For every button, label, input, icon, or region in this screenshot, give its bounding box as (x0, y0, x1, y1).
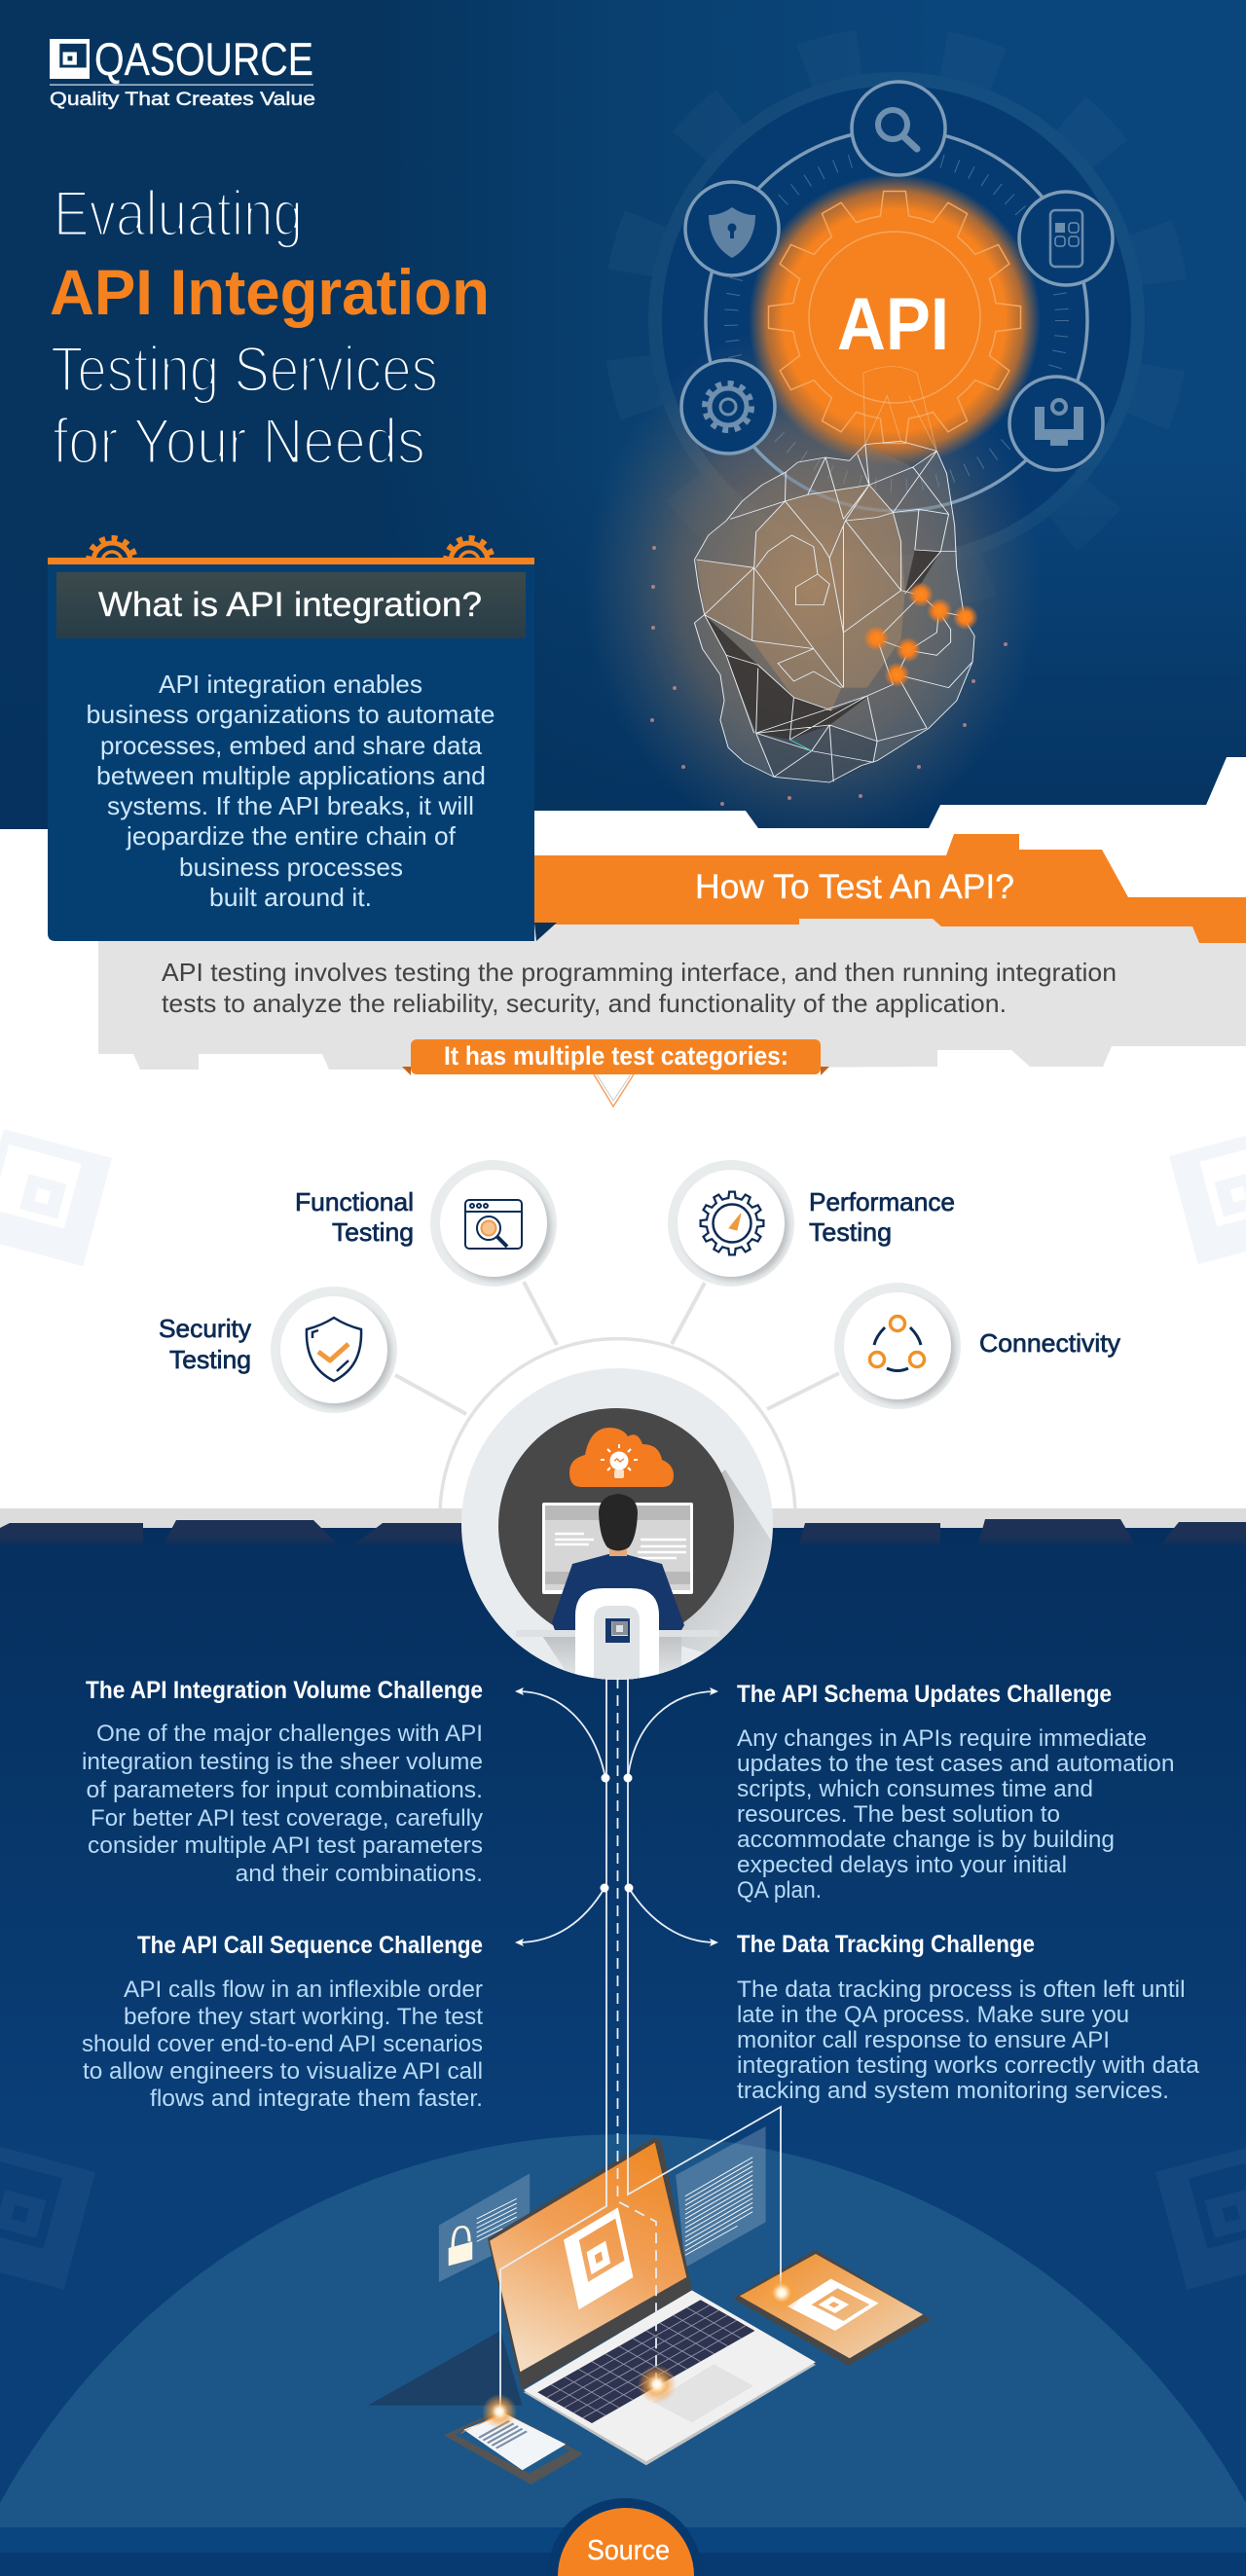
text: API Call Sequence Challenge: should cover end-to-end API scenarios (82, 2031, 483, 2057)
text: API Call Sequence Challenge: The API Call Sequence Challenge (137, 1932, 483, 1959)
text: API Integration Volume Challenge: For better API test coverage, carefully (91, 1805, 483, 1832)
panel: challenges background (0, 1508, 1246, 2576)
text: API Integration Volume Challenge: The API Integration Volume Challenge (86, 1677, 483, 1704)
text: API Schema Updates Challenge: QA plan. (737, 1877, 822, 1904)
text: Data Tracking Challenge: tracking and system monitoring services. (737, 2078, 1169, 2104)
label (295, 1187, 414, 1247)
category: Security Testing (159, 1287, 397, 1413)
keyboard (537, 2300, 754, 2423)
text: Data Tracking Challenge: The data tracking process is often left until (737, 1977, 1186, 2003)
arrow: volume challenge (518, 1691, 605, 1778)
text: API Integration Volume Challenge: One of the major challenges with API (96, 1721, 483, 1747)
arrowheads and nodes (482, 1687, 801, 2429)
watermark logos (0, 1127, 1246, 1266)
phone (446, 2411, 581, 2484)
text: API Integration Volume Challenge: and their combinations. (236, 1861, 483, 1887)
description text (162, 958, 1117, 1018)
panel body text (86, 670, 495, 912)
laptop shadow (368, 2331, 523, 2406)
particles (650, 546, 1008, 806)
logo: Quality That Creates Value (50, 90, 315, 110)
label: Performance (809, 1187, 955, 1216)
text: API Integration Volume Challenge: integration testing is the sheer volume (82, 1749, 483, 1775)
panel body text: jeopardize the entire chain of (126, 821, 457, 851)
monitor (542, 1503, 693, 1594)
cloud with idea (569, 1428, 674, 1487)
panel body text: processes, embed and share data (100, 731, 483, 760)
person (552, 1494, 684, 1630)
brown glow around the hand (600, 350, 1025, 828)
banner: How To Test An API (98, 834, 1246, 1070)
watermark logos (0, 2141, 1246, 2290)
connector lines (395, 1282, 839, 1516)
text: API Call Sequence Challenge: before they start working. The test (124, 2004, 483, 2030)
outer faint gear (648, 72, 1145, 535)
label: Testing (809, 1217, 892, 1247)
text: Data Tracking Challenge: integration testing works correctly with data (737, 2052, 1200, 2079)
grey description panel (98, 919, 1246, 1070)
source button: Source (587, 2535, 670, 2566)
banner heading: How To Test An API? (695, 868, 1014, 906)
label: Security (159, 1314, 251, 1343)
description text: API testing involves testing the programming interface, and then running integration (162, 958, 1117, 987)
label: Functional (295, 1187, 414, 1216)
arrow: schema challenge (628, 1691, 715, 1778)
person at computer badge (461, 1368, 779, 1684)
gear ornaments (86, 535, 495, 558)
category: Performance Testing (668, 1160, 955, 1287)
hand wireframe (694, 367, 978, 782)
text: Data Tracking Challenge: The Data Tracking Challenge (737, 1931, 1035, 1958)
category: Connectivity (834, 1283, 1120, 1409)
text: API Schema Updates Challenge (737, 1681, 1174, 1904)
text: API Call Sequence Challenge: API calls flow in an inflexible order (124, 1977, 483, 2003)
callout: multiple test categories: It has multiple test categories: (444, 1041, 788, 1070)
API label: API (837, 283, 949, 366)
panel body text: systems. If the API breaks, it will (107, 791, 474, 820)
panel body text: business processes (179, 853, 403, 882)
dark disc (498, 1408, 734, 1644)
text: API Schema Updates Challenge: Any changes in APIs require immediate (737, 1725, 1147, 1752)
vertical connector system (500, 1678, 781, 2412)
description text: tests to analyze the reliability, security, and functionality of the application. (162, 989, 1007, 1018)
text: API Call Sequence Challenge: to allow engineers to visualize API call (83, 2058, 483, 2085)
panel heading (56, 572, 526, 638)
icon: phone (1019, 192, 1113, 285)
API hub graphic (681, 82, 1113, 511)
title: Testing Services (51, 333, 438, 405)
icon: shield (307, 1318, 361, 1381)
title: Evaluating (54, 177, 303, 249)
title: API Integration (50, 256, 490, 328)
panel: what is API integration (48, 558, 557, 941)
icon: monitor (1009, 377, 1103, 470)
text: API Schema Updates Challenge: updates to the test cases and automation (737, 1751, 1174, 1777)
text: API Call Sequence Challenge: flows and integrate them faster. (150, 2086, 483, 2112)
glowing joints (863, 582, 978, 687)
icon: browser search (465, 1200, 522, 1249)
panel body text: built around it. (209, 883, 372, 912)
text: API Schema Updates Challenge: The API Schema Updates Challenge (737, 1681, 1112, 1708)
devices illustration (368, 2126, 929, 2484)
text: Data Tracking Challenge: late in the QA process. Make sure you (737, 2002, 1129, 2028)
orange banner (534, 834, 1246, 943)
text: API Call Sequence Challenge (82, 1932, 483, 2112)
text: API Schema Updates Challenge: expected delays into your initial (737, 1852, 1067, 1878)
callout: multiple test categories (402, 1039, 829, 1107)
tablet (735, 2251, 929, 2364)
logo: QASOURCE (94, 33, 313, 85)
panel: hero background (0, 0, 1246, 847)
icon: search (852, 82, 945, 175)
title: for Your Needs (53, 405, 425, 477)
text: API Schema Updates Challenge: resources. The best solution to (737, 1801, 1060, 1828)
source button (547, 2498, 703, 2576)
chair with logo (575, 1588, 659, 1684)
laptop (488, 2137, 816, 2465)
icon: gear (681, 360, 775, 454)
dome (0, 2134, 1246, 2576)
category: Functional Testing (295, 1160, 557, 1287)
text: Data Tracking Challenge: monitor call response to ensure API (737, 2027, 1110, 2053)
text: API Integration Volume Challenge: of parameters for input combinations. (86, 1777, 483, 1803)
arrow: call sequence challenge (518, 1888, 605, 1942)
orange API glow (749, 174, 1041, 466)
text: API Integration Volume Challenge (82, 1677, 483, 1887)
icon: speed gear (701, 1192, 763, 1254)
label: Testing (332, 1217, 414, 1247)
label (809, 1187, 955, 1247)
long shadow (681, 1469, 772, 1652)
panel body text: between multiple applications and (96, 761, 486, 790)
panel body text: API integration enables (159, 670, 422, 699)
label: Testing (169, 1345, 251, 1374)
connecting ring (706, 129, 1087, 511)
label: Connectivity (979, 1328, 1120, 1358)
panel heading: What is API integration? (98, 586, 482, 624)
floating panel: lock (439, 2173, 530, 2282)
logo (50, 33, 315, 110)
floating panel: document (676, 2126, 766, 2268)
gear outline (769, 191, 1020, 444)
icon: network (870, 1316, 925, 1370)
tick marks (731, 155, 1062, 486)
desk (516, 1630, 719, 1637)
panel body text: business organizations to automate (86, 700, 495, 729)
text: API Schema Updates Challenge: accommodate change is by building (737, 1827, 1115, 1853)
fingertip fading into glow (863, 367, 936, 451)
icon: shield (685, 182, 779, 275)
label (159, 1314, 251, 1374)
arrow: data tracking challenge (629, 1888, 715, 1942)
title (50, 177, 490, 477)
text: API Schema Updates Challenge: scripts, which consumes time and (737, 1776, 1093, 1802)
text: Data Tracking Challenge (737, 1931, 1200, 2104)
text: API Integration Volume Challenge: consider multiple API test parameters (88, 1832, 483, 1859)
